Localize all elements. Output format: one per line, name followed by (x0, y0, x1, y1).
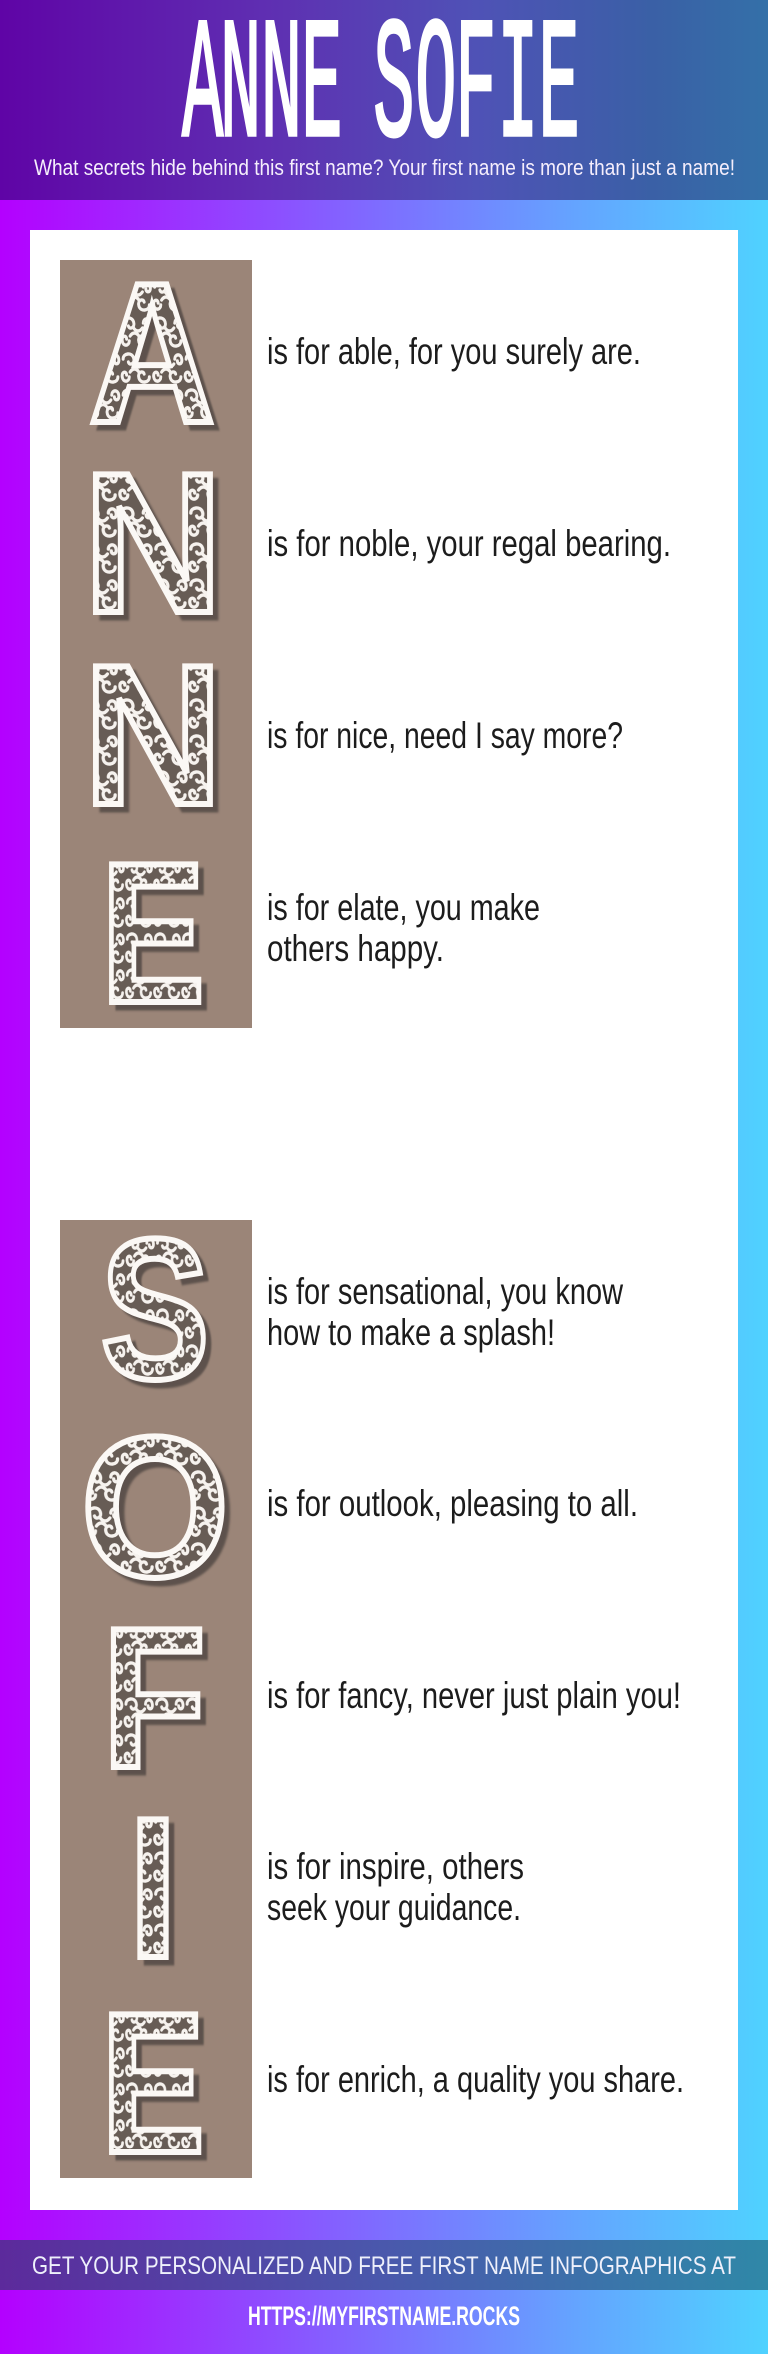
text: I lines: seek your guidance. (267, 1887, 521, 1928)
letter S: S (100, 1196, 210, 1421)
letter O: O (80, 1395, 230, 1619)
main white panel (30, 230, 738, 2210)
letter I: I (134, 1783, 184, 2006)
footer URL: HTTPS://MYFIRSTNAME.ROCKS (248, 2301, 520, 2331)
text: N line: is for noble, your regal bearing. (267, 523, 671, 564)
text: E lines: others happy. (267, 928, 444, 969)
text: S lines: how to make a splash! (267, 1312, 555, 1353)
letter N: N (89, 629, 229, 853)
text: S lines: is for sensational, you know (267, 1271, 623, 1312)
letter N: N (83, 431, 223, 655)
letter F: F (108, 1593, 212, 1816)
letter O: O (86, 1401, 236, 1625)
footer band (0, 2240, 768, 2290)
letter N: N (89, 437, 229, 661)
header band (0, 0, 768, 200)
text: E lines: is for elate, you make (267, 887, 540, 928)
text: O line: is for outlook, pleasing to all. (267, 1483, 638, 1524)
letter A: A (89, 241, 215, 465)
text: A line: is for able, for you surely are. (267, 331, 641, 372)
panel: ANNE letter column (60, 241, 252, 1051)
letter N: N (83, 623, 223, 847)
text: E lines (267, 887, 540, 969)
text: I lines: is for inspire, others (267, 1846, 524, 1887)
letter E: E (107, 1978, 211, 2201)
letter A: A (95, 247, 221, 471)
letter S: S (106, 1202, 216, 1427)
letter E: E (101, 822, 205, 1045)
letter I: I (128, 1777, 178, 2000)
letter E: E (107, 828, 211, 1051)
panel: SOFIE letter column (60, 1196, 252, 2201)
text: N line: is for nice, need I say more? (267, 715, 623, 756)
letter F: F (102, 1587, 206, 1810)
text: S lines (267, 1271, 623, 1353)
text: I lines (267, 1846, 524, 1928)
letter E: E (101, 1972, 205, 2195)
